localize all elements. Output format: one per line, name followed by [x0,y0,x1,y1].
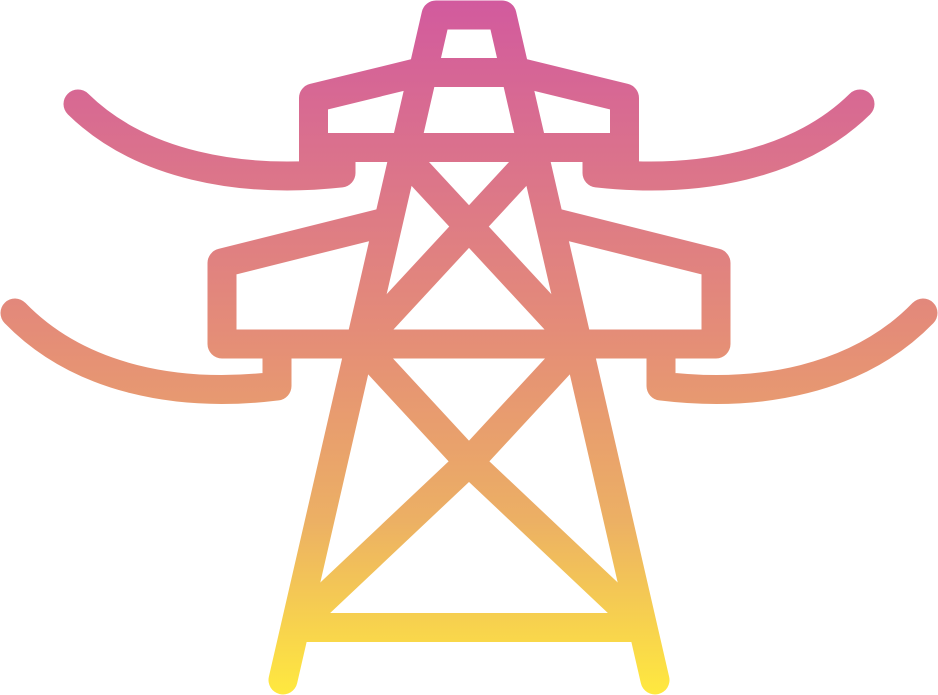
tower legs and cap [283,15,655,680]
upper diagonal braces [376,165,562,327]
bottom crossbar [295,613,643,642]
upper left arm corner [299,147,329,169]
lower diagonal braces [308,355,630,614]
top crossbar [425,58,513,87]
upper right arm corner [609,147,639,169]
lower cross arm [222,224,716,344]
upper cross arm [314,71,624,148]
lower left cable [15,313,277,389]
upper right cable [597,104,860,176]
upper left cable [78,104,341,176]
lower right cable [661,313,923,389]
